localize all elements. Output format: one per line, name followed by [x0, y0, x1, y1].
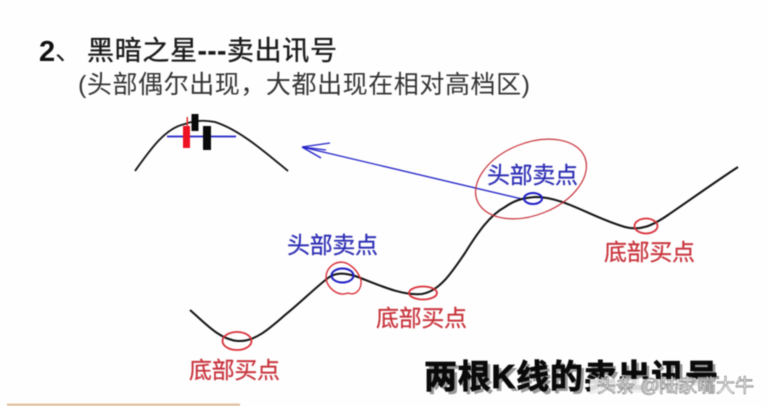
black candle lower	[203, 126, 211, 150]
marker: bottom buy point 1	[189, 332, 280, 383]
title: 黑暗之星---卖出讯号	[87, 36, 337, 66]
subtitle: (头部偶尔出现，大都出现在相对高档区)	[78, 71, 530, 99]
arrow to small chart	[302, 143, 522, 199]
caption: two-candle sell signal: 两根K线的卖出讯号	[427, 361, 721, 398]
marker: bottom buy point 2	[376, 286, 467, 331]
marker: bottom buy point 3: 底部买点	[604, 239, 695, 265]
black candle upper	[192, 114, 198, 131]
title: 2	[39, 36, 55, 68]
caption: two-candle sell signal: 两根K线的卖出讯号	[424, 358, 718, 395]
marker: bottom buy point 2: 底部买点	[376, 305, 467, 331]
marker: bottom buy point 3	[604, 218, 695, 265]
small chart: dark star pattern	[135, 114, 288, 171]
marker: top sell point 1	[287, 232, 378, 294]
marker: top sell point 2: 头部卖点	[487, 162, 578, 188]
red candle	[183, 117, 190, 148]
watermark: 头条 @陆家嘴大牛	[597, 375, 754, 397]
blue level line	[167, 136, 236, 138]
title: 、	[55, 36, 82, 66]
main price curve	[190, 167, 738, 341]
marker: top sell point 1: 头部卖点	[287, 232, 378, 258]
marker: top sell point 2	[464, 124, 598, 234]
marker: bottom buy point 1: 底部买点	[189, 357, 280, 383]
watermark backdrop	[590, 379, 767, 406]
bottom edge bar	[7, 404, 240, 406]
curve	[135, 121, 288, 171]
